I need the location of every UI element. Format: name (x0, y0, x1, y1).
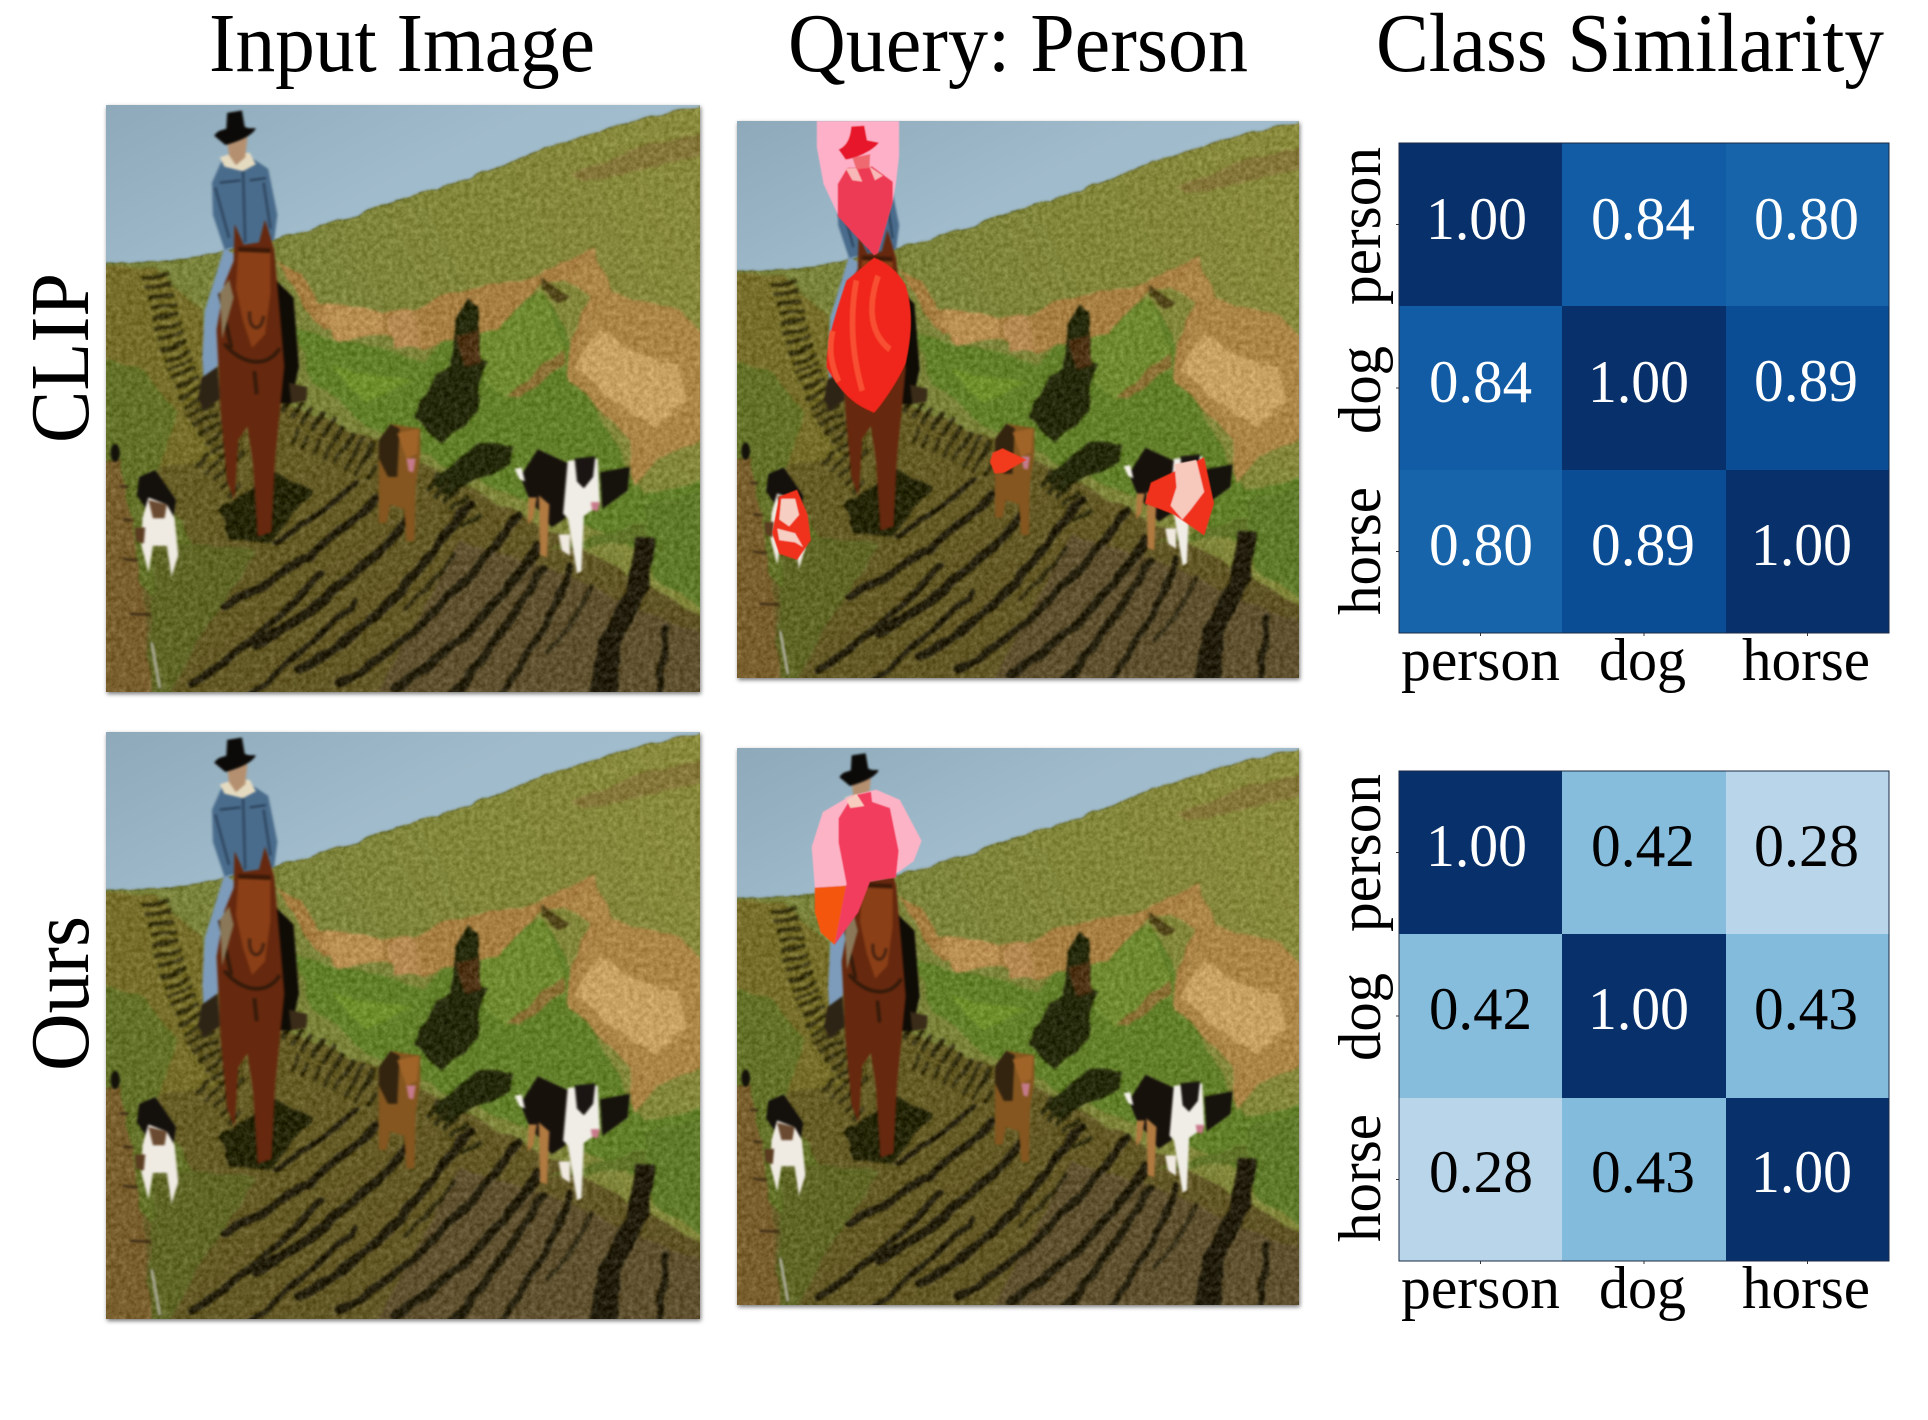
heatmap axis labels: horse (1742, 1255, 1870, 1321)
overlay: Ours relevance mask (811, 789, 922, 946)
photo: CLIP input image (86, 102, 718, 711)
heatmap values: 1.00 (1426, 186, 1527, 252)
heatmap values: 1.00 (1751, 512, 1852, 578)
heatmap values (1426, 813, 1859, 1205)
heatmap values: 0.84 (1429, 349, 1532, 415)
heatmap axis labels: horse (1327, 1114, 1393, 1242)
photo: CLIP query map with red person overlay (718, 118, 1316, 696)
heatmap values: 0.42 (1429, 976, 1532, 1042)
heatmap axis labels: person (1327, 774, 1393, 932)
heatmap values: 0.42 (1591, 813, 1695, 879)
heatmap values (1426, 186, 1859, 578)
heatmap axis labels (1327, 774, 1870, 1321)
heatmap axis labels: dog (1599, 1255, 1686, 1321)
photo: Ours query map with red person overlay (718, 745, 1316, 1323)
heatmap axis labels: person (1327, 147, 1393, 305)
heatmap cells (1396, 143, 1889, 636)
heatmap values: 1.00 (1751, 1139, 1852, 1205)
heatmap values: 0.89 (1591, 512, 1695, 578)
heatmap values: 1.00 (1426, 813, 1527, 879)
heatmap values: 0.43 (1591, 1139, 1695, 1205)
heatmap: Ours class similarity (1327, 771, 1889, 1321)
heatmap values: 0.89 (1754, 348, 1858, 414)
heatmap axis labels: dog (1599, 627, 1686, 693)
heatmap values: 0.80 (1754, 186, 1859, 252)
heatmap values: 0.43 (1754, 976, 1858, 1042)
heatmap axis labels: dog (1327, 973, 1393, 1061)
heatmap values: 0.28 (1754, 813, 1859, 879)
heatmap: CLIP class similarity (1327, 143, 1889, 693)
heatmap axis labels (1327, 147, 1870, 693)
heatmap axis labels: person (1401, 1255, 1560, 1321)
heatmap axis labels: horse (1742, 627, 1870, 693)
heatmap values: 0.84 (1591, 186, 1695, 252)
heatmap axis labels: dog (1327, 346, 1393, 434)
heatmap values: 1.00 (1588, 976, 1689, 1042)
heatmap axis labels: person (1401, 627, 1560, 693)
heatmap values: 0.80 (1429, 512, 1533, 578)
heatmap axis labels: horse (1327, 487, 1393, 615)
row label: CLIP: CLIP (14, 273, 107, 443)
row label: Ours: Ours (14, 916, 107, 1071)
heatmap cells (1396, 771, 1889, 1264)
heatmap values: 0.28 (1429, 1139, 1533, 1205)
overlay: CLIP relevance mask (772, 121, 1215, 560)
heatmap values: 1.00 (1588, 349, 1689, 415)
photo: Ours input image (86, 729, 718, 1338)
